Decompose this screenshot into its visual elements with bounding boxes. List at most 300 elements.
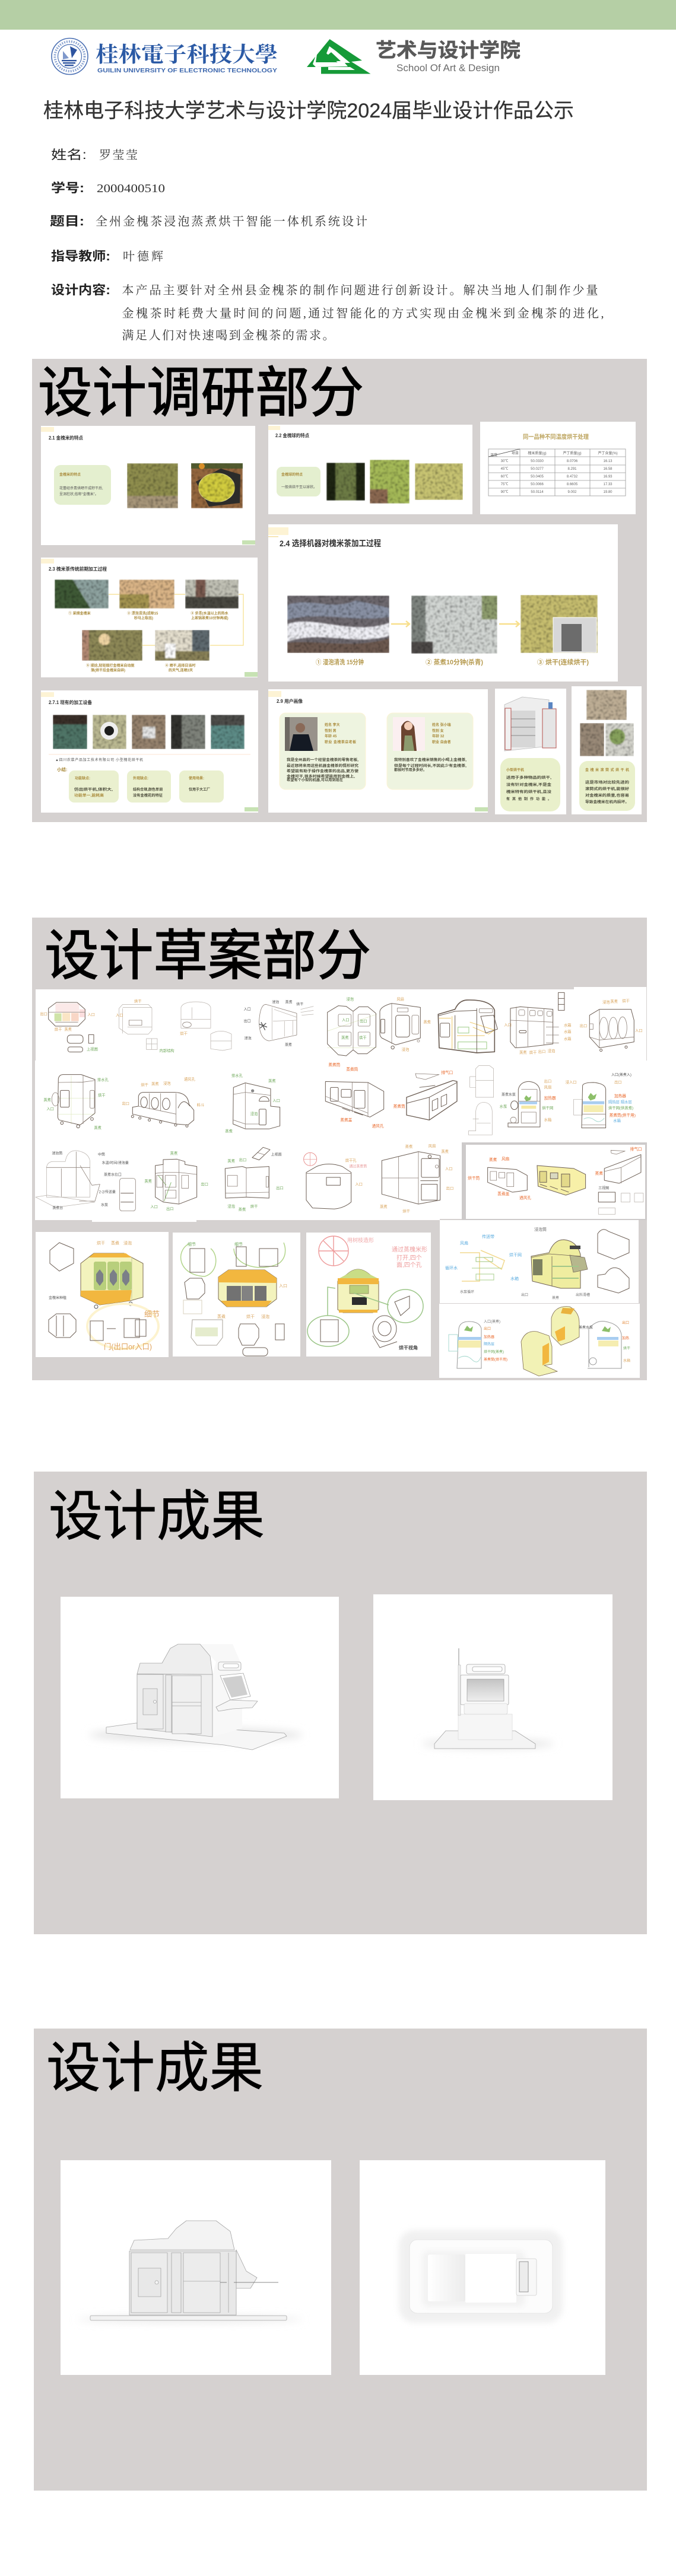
data table: 9.002: [567, 491, 577, 494]
sketch: framed orange-labelled machine: 通风孔: [519, 1195, 531, 1201]
sketch: pencil concept with platform: 水泵: [101, 1202, 108, 1207]
sketch: pencil concept with platform: 中筒: [98, 1152, 105, 1157]
labels: 浸泡: [261, 1314, 269, 1319]
school Chinese name: 艺术与设计学院: [376, 39, 521, 61]
sketch: section view front: 加热器: [544, 1095, 556, 1100]
sketch: rounded box: 内部结构: [159, 1047, 174, 1053]
sketch: paired cabinet: 上视图: [271, 1152, 282, 1157]
photo: drum left: [580, 723, 604, 756]
door detail with yellow ring: [87, 1304, 160, 1351]
persona story: 我是全州县的一个经营金槐茶的零售老板,: [287, 757, 358, 762]
section labels left: [484, 1319, 507, 1362]
section labels left: 出口: [484, 1326, 491, 1331]
sketch: angular cabinet: 蒸煮: [441, 1148, 449, 1154]
photo: dryer cabinet: [504, 697, 556, 751]
sketch: three-section machine: 蒸煮: [170, 1151, 178, 1156]
sketch: capsule pencil draft: 出口: [244, 1018, 251, 1023]
caption 3: [191, 611, 228, 620]
pink note: 通过蒸槐米形: [392, 1246, 427, 1253]
persona details: 姓名 李大: [325, 722, 340, 727]
persona story: [287, 757, 358, 782]
text card: 呈洞柱状,俗称“金槐米”。: [59, 492, 99, 496]
machine rendering with dome: [338, 1269, 379, 1313]
student number row: [51, 181, 165, 195]
photo: woman illustration: [393, 717, 425, 751]
sketch: orange-labelled machine: [325, 1062, 384, 1129]
table title: 同一品种不同温度烘干处理: [523, 433, 589, 441]
data table: 60℃: [501, 475, 508, 479]
sketch: orange-labelled machine: 蒸煮筒: [346, 1066, 358, 1072]
text card: 槐米特有的烘干机,且没: [506, 789, 551, 794]
sketch: three-section machine: 出口: [201, 1181, 208, 1186]
sketch: paired cabinet: 烘干: [250, 1203, 258, 1209]
sketch: four-section cabinet with ladder: 浸泡: [548, 1048, 556, 1053]
advisor row: 叶德辉: [123, 250, 163, 263]
top labels: [49, 1240, 132, 1300]
persona story: 但是每个过程时间长,不因此少有金槐茶,: [394, 763, 466, 768]
top right small sketch: [598, 1230, 629, 1259]
process arrows: [109, 594, 243, 645]
caption 4: 的天气,连晒3天: [169, 668, 193, 673]
persona details: 年龄 45: [325, 734, 337, 738]
sketch: rounded cabinet: 排水孔: [97, 1077, 109, 1082]
pink note: 打开,四个: [396, 1254, 422, 1262]
sketch: front elevations: [468, 1066, 494, 1135]
photo: drum right: [605, 723, 634, 756]
caption 2: ② 漂泡清洗(滤除15: [127, 611, 158, 616]
machine rendering with three hex windows: [81, 1253, 143, 1308]
sketch: yellow colored machine: [537, 1166, 586, 1195]
data table: 50.0330: [531, 460, 544, 463]
slide 2.9 user personas: [268, 689, 488, 813]
caption 3: 上蒸锅蒸煮10分钟再成): [191, 616, 228, 620]
sketch: angular cabinet: 蒸煮: [405, 1144, 413, 1149]
data table: 50.0405: [531, 475, 544, 479]
gray labels: 蒸煮: [552, 1295, 559, 1300]
sketch: four-section cabinet with ladder: 水箱: [564, 1036, 572, 1041]
caption 2: [127, 611, 158, 620]
text card: 一般烘焙干至以球状。: [281, 485, 317, 489]
section labels right: [579, 1320, 630, 1363]
card: usage scene: 使用场景:: [189, 776, 204, 781]
sketch: double hexagon unit: 浸泡: [346, 996, 354, 1002]
sketch: section view side: 隔热层 隔水层: [608, 1099, 632, 1104]
persona card 2: [387, 713, 473, 789]
photo: dried buds: [127, 463, 178, 508]
pink note: 用树枝造形: [347, 1237, 374, 1243]
card: appearance drawback: 结构合理,颜色单调: [133, 787, 163, 792]
sketch: long machine with three ovals: 通风孔: [184, 1077, 196, 1082]
sketch: three ovals hexagon: 蒸煮: [610, 999, 618, 1004]
door detail with yellow ring: 门(出口or入口): [104, 1342, 152, 1351]
sketch: double hexagon unit: 出口: [360, 1018, 367, 1023]
sketch: angular cabinet: 出口: [446, 1186, 453, 1191]
sketch: paired cabinet: 出口: [276, 1185, 284, 1190]
card: appearance drawback: [127, 770, 171, 803]
render: front view: [373, 1594, 612, 1800]
exploded view: [460, 1250, 504, 1281]
sketch: orange-labelled machine: 通风孔: [372, 1123, 384, 1129]
sketch: framed orange-labelled machine: 蒸煮盖: [497, 1191, 510, 1196]
heading: design research: 设计调研部分: [38, 363, 364, 424]
sketch: four-section cabinet with ladder: 蒸煮: [519, 1050, 527, 1055]
slide: drying data table: [480, 422, 636, 514]
sketch: section view front: 水泵: [500, 1103, 507, 1109]
advisor row: 指导教师:: [51, 250, 110, 263]
card: function drawback: 功能缺点:: [75, 776, 90, 781]
sketch: three ovals hexagon: 入口: [635, 1028, 643, 1033]
sketch: tall machine: 入口: [272, 1098, 280, 1103]
sketch: framed orange-labelled machine: 风扇: [502, 1156, 509, 1161]
photo: washing: [119, 579, 174, 609]
sketch: three ovals hexagon: 出口: [580, 1023, 587, 1029]
door details: [188, 1241, 278, 1272]
slide title: 2.1 金槐米的特点: [49, 435, 83, 441]
text card: 金槐球的特点: [281, 472, 303, 477]
sketch: angled machine with hood: [393, 1070, 457, 1120]
data table: 项目: [512, 451, 519, 456]
sketch: dome machine: 烘干: [180, 1030, 188, 1036]
section view right: [588, 1322, 621, 1368]
labels: 入口: [279, 1284, 287, 1288]
framed sketch sheet: [462, 1142, 647, 1220]
persona details: 性别 男: [325, 728, 337, 733]
sketch: hexagon machine with labels: [40, 1002, 98, 1052]
photo: picking: [55, 579, 109, 609]
sketch: double hexagon unit: [328, 996, 377, 1056]
sketch: tall machine: 排水孔: [231, 1073, 243, 1078]
design description row: 满足人们对快速喝到金槐茶的需求。: [122, 329, 335, 342]
sketch: paired cabinet: 浸泡: [227, 1203, 236, 1209]
photo: drum top: [586, 690, 627, 720]
caption 3: ③ 烘干(连续烘干): [537, 658, 589, 666]
sketch: paired cabinet: 蒸煮: [227, 1158, 236, 1163]
photo: equipment 4: [171, 715, 205, 749]
data table: 16.93: [603, 475, 612, 479]
logo: School of Art & Design: [307, 39, 521, 74]
sketch: rounded box: [116, 998, 174, 1053]
sketch sheet background: [35, 987, 647, 1222]
slide title: 2.4 选择机器对槐米茶加工过程: [280, 539, 381, 548]
photo: buds on plate: [191, 463, 243, 508]
coloured sketch sheet C: [306, 1233, 431, 1357]
section labels left: 烘干网(蒸煮): [484, 1349, 504, 1354]
sketch: pencil concept with platform: 2-2/传送量: [99, 1190, 116, 1195]
text card: 对金槐米的质量,也容易: [585, 793, 629, 798]
sketch: rounded cabinet with wheels: 蒸煮: [423, 1019, 431, 1024]
photo: soaking water: [287, 596, 389, 653]
data table: 45℃: [501, 467, 508, 471]
text card: 没有针对金槐米,不是金: [506, 782, 551, 787]
detail sketches: 烘干视角: [399, 1345, 418, 1351]
sketch: hexagon machine with labels: 出口: [40, 1011, 47, 1017]
render: side elevation: [61, 2160, 331, 2375]
sketch: angular cabinet: 风扇: [429, 1143, 436, 1148]
sketch: pencil concept with platform: 蒸煮台: [52, 1205, 63, 1210]
gray labels: 出料滑槽: [576, 1292, 590, 1297]
green detail arcs: [307, 1287, 423, 1346]
section view left: [449, 1322, 481, 1368]
photo: sun drying: [155, 630, 210, 661]
sketch: capsule pencil draft: 入口: [244, 1007, 251, 1011]
data table: 芦丁含量(%): [598, 451, 618, 456]
section labels left: 隔热层: [484, 1342, 494, 1346]
persona details: [432, 722, 451, 744]
section labels left: 入口(蒸煮): [484, 1319, 500, 1324]
sketch: angular cabinet: 蒸煮: [380, 1204, 388, 1209]
sketch: long machine with three ovals: [122, 1077, 204, 1127]
data table: [488, 449, 626, 496]
sketch: section view side: [566, 1072, 636, 1128]
sketch: rounded cabinet with wheels: [380, 996, 431, 1052]
card: usage scene: 仅用于大工厂: [189, 787, 210, 792]
data table: 16.13: [603, 460, 612, 463]
section labels left: 蒸煮筒(烘干用): [484, 1357, 507, 1362]
sketch: long machine with three ovals: 浸泡: [163, 1080, 171, 1085]
blue labels: 烘干网: [509, 1252, 522, 1257]
logo: Guilin University of Electronic Technology: [52, 38, 278, 75]
slide 2.7.1: [41, 690, 258, 813]
sketch: angular cabinet: 烘干: [402, 1208, 410, 1214]
sketch: section view side: 蒸煮筒(烘干用): [610, 1113, 636, 1118]
data table: 16.58: [603, 467, 612, 471]
name row: [51, 148, 138, 162]
blue labels: [445, 1234, 522, 1294]
sketch: hexagon machine with labels: 入口: [87, 1012, 95, 1017]
isometric yellow units: [521, 1307, 579, 1376]
sketch: double hexagon unit: 入口: [342, 1018, 350, 1023]
caption 3: ③ 杀青(水温以上的热水: [191, 611, 228, 616]
sketch: cooker-shaped machine: 通过蒸煮筒: [349, 1164, 367, 1168]
project title row: 全州金槐茶浸泡蒸煮烘干智能一体机系统设计: [96, 215, 367, 228]
sketch: angular cabinet: [380, 1143, 453, 1214]
sketch: pencil concept with platform: 蒸煮水位口: [104, 1172, 122, 1177]
card: appearance drawback: 外观缺点:: [133, 776, 148, 781]
section labels left: 加热器: [484, 1335, 494, 1339]
gray labels: 浸泡筒: [534, 1227, 547, 1232]
detail sketches: [320, 1296, 418, 1351]
slide 2.3: [41, 558, 258, 677]
persona details: 职业 自由者: [432, 740, 451, 744]
student number row: 学号:: [51, 181, 84, 195]
sketch: section view side: 烘干网(供蒸煮): [608, 1105, 633, 1110]
caption 2: 秒马上取出): [134, 616, 153, 620]
persona details: 姓名 张小瑞: [432, 722, 451, 727]
photo: blanching: [185, 579, 239, 609]
sketch: hexagon machine with labels: 上视图: [87, 1046, 98, 1052]
persona story: 希望能有助于操作金槐茶的出品,更方便: [287, 769, 358, 773]
sketch: three-section machine: 蒸煮: [144, 1178, 153, 1183]
name row: 姓名:: [51, 148, 87, 162]
sketch: orange-labelled machine: 蒸煮筒: [328, 1062, 341, 1067]
slide 2.1: [41, 426, 255, 545]
sketch: orange-labelled machine: 蒸煮盖: [340, 1117, 353, 1123]
advisor row: [51, 250, 163, 263]
sketch: three-section machine: 入口: [150, 1205, 158, 1209]
sketch: section view side: 浸入口: [566, 1080, 577, 1085]
labels: 蒸煮: [217, 1314, 226, 1319]
text card: [277, 467, 320, 496]
persona story: [394, 757, 466, 772]
sketch: section view side: 水箱: [613, 1118, 621, 1123]
sketch: pencil concept with platform: [36, 1151, 135, 1211]
sketch: framed angled machine and views: 三视图: [598, 1186, 609, 1190]
card: function drawback: 功能单一,能耗高: [74, 793, 104, 798]
front detail sketch: [49, 1314, 76, 1338]
photo: green shrub: [370, 460, 410, 504]
sketch: angled machine with hood: 排气口: [441, 1070, 453, 1075]
heading: design results: 设计成果: [49, 1486, 265, 1547]
persona details: 职业 金槐茶店老板: [325, 740, 356, 744]
lower right small sketch: [598, 1268, 629, 1293]
persona story: 最近想将来用这些机器金槐茶的情形研究: [287, 763, 358, 768]
sketch: paired cabinet: 出口: [239, 1157, 246, 1163]
sketch: rounded cabinet: 蒸煮: [94, 1125, 102, 1130]
section labels right: 出口: [622, 1320, 629, 1325]
coloured sketch sheet D: [440, 1220, 639, 1303]
coloured sketch sheet E: [439, 1304, 640, 1378]
data table: 槐米质量(g): [528, 451, 547, 456]
persona details: 年龄 32: [432, 734, 445, 738]
sketch: three-section machine: [144, 1151, 208, 1211]
sketch: long machine with three ovals: 出口: [122, 1100, 129, 1106]
sketch: dome concept with colored lines: [438, 1000, 497, 1053]
sketch: pencil concept with platform: 水温/时间/浸泡量: [102, 1160, 129, 1165]
sketch: paired cabinet: 蒸煮: [239, 1206, 246, 1212]
sketch: angular cabinet: 入口: [445, 1167, 453, 1171]
data table: 19.80: [603, 491, 612, 494]
small elevations: [183, 1278, 284, 1356]
pink note: [347, 1237, 427, 1269]
persona story: 希望有个小型的机器,可以用到现在: [287, 778, 343, 782]
panel: design sketches: [32, 918, 647, 1380]
sketch: framed orange-labelled machine: 蒸煮: [489, 1157, 497, 1163]
pink sphere detail: [319, 1236, 348, 1266]
section labels right: 水箱: [623, 1358, 630, 1363]
sketch: rounded cabinet: [43, 1075, 109, 1130]
caption 2: ② 蒸煮10分钟(杀青): [426, 658, 483, 666]
sketch: paired cabinet: [225, 1147, 284, 1212]
machine rendering with dark windows: [218, 1270, 277, 1307]
caption 5: [86, 663, 134, 673]
data table: 90℃: [501, 490, 508, 494]
pink note: 面,四个孔: [396, 1262, 422, 1269]
blue labels: 水泵循环: [460, 1289, 474, 1294]
coloured sketch sheet A: [36, 1232, 169, 1357]
persona details: [325, 722, 356, 744]
slide title: 2.7.1 现有的加工设备: [49, 699, 92, 705]
top green band: [0, 0, 676, 30]
top detail sketch: [50, 1243, 74, 1271]
slide: drum dryer: [572, 686, 642, 814]
sketch: section view front: 风扇: [544, 1084, 551, 1090]
sketch: double hexagon unit: 烘干: [359, 1035, 367, 1040]
labels: [217, 1284, 287, 1319]
sketch: section view front: 蒸煮水泵: [502, 1092, 516, 1097]
sketch: tall machine: 浸泡: [250, 1111, 258, 1116]
green detail arcs: [181, 1243, 285, 1276]
arrow: [391, 621, 410, 627]
card: appearance drawback: 没有金槐花的特征: [133, 793, 163, 798]
slide title: 2.2 金槐球的特点: [275, 432, 309, 438]
sketch: angled machine with hood: 蒸煮筒: [393, 1103, 405, 1109]
data table: 17.33: [603, 483, 612, 486]
slide title: 2.9 用户画像: [277, 698, 303, 704]
sketch: framed orange-labelled machine: 烘干筒: [468, 1175, 480, 1180]
text card: 滚筒式的烘干机,能很好: [585, 787, 629, 791]
door details: 细节: [188, 1241, 196, 1247]
sketches group: right half: [306, 992, 643, 1214]
school English name: School Of Art & Design: [396, 62, 500, 74]
photo: equipment 2: [93, 715, 126, 749]
top labels: 蒸煮: [111, 1240, 119, 1246]
render: perspective view: [61, 1597, 339, 1798]
design description row: 金槐茶时耗费大量时间的问题,通过智能化的方式实现由金槐米到金槐茶的进化,: [122, 307, 604, 320]
photo: rubbing: [82, 630, 142, 661]
sketch: four-section cabinet with ladder: 水箱: [564, 1029, 572, 1034]
sketch: dome machine: [180, 1002, 231, 1050]
sketch: section view front: [500, 1078, 556, 1127]
sketch: cooker-shaped machine: 入口: [355, 1182, 363, 1186]
sketch: three ovals hexagon: 浸泡: [602, 999, 610, 1005]
sketch: capsule pencil draft: 浸泡: [245, 1036, 252, 1040]
data table: 75℃: [501, 482, 508, 486]
text card: 金槐米的特点: [59, 472, 81, 477]
coloured sketch sheet B: [173, 1233, 300, 1357]
photo: drying field: [415, 463, 463, 500]
card: function drawback: [69, 770, 119, 803]
main title: 桂林电子科技大学艺术与设计学院2024届毕业设计作品公示: [43, 100, 574, 122]
sketch: tall machine: 蒸煮: [268, 1078, 276, 1083]
text card: 有其他制作功能。: [506, 797, 551, 801]
top labels: 浸泡: [123, 1240, 132, 1246]
text card: [500, 758, 560, 811]
sketch: rounded cabinet: 入口: [46, 1107, 54, 1112]
sketch: rounded box: 入口: [116, 1012, 123, 1017]
design description row: 本产品主要针对全州县金槐茶的制作问题进行创新设计。解决当地人们制作少量: [122, 284, 598, 297]
name row: 罗莹莹: [99, 148, 138, 162]
university name: 桂林電子科技大學: [96, 43, 278, 66]
project title row: 题目:: [50, 215, 84, 228]
blue labels: 循环水: [445, 1265, 458, 1271]
text card: 小型烘干机: [506, 768, 524, 772]
door details: 细节: [234, 1241, 243, 1247]
data table: 温度: [490, 453, 497, 457]
sketch: sphere detail: [304, 1152, 317, 1166]
render: top view: [360, 2160, 605, 2375]
sketch: long machine with three ovals: 蒸煮: [151, 1081, 159, 1086]
gray labels: 出口: [521, 1292, 528, 1297]
summary label: 小结:: [57, 766, 68, 772]
caption 4: ④ 晒干,选择日当时: [165, 663, 195, 668]
sketch: four-section cabinet with ladder: 烘干: [529, 1050, 537, 1055]
yellow machine: [531, 1240, 588, 1288]
sketch: cooker-shaped machine: 烘干孔: [345, 1157, 357, 1163]
sketch: framed angled machine and views: 排气口: [630, 1146, 642, 1151]
sketch: long machine with three ovals: 烘干: [141, 1082, 148, 1087]
slide 2.4: [268, 524, 618, 682]
text card: [54, 465, 111, 505]
slide title: 2.3 槐米茶传统前期加工过程: [49, 566, 107, 572]
top labels: 烘干: [97, 1240, 105, 1246]
card: function drawback: 仿出烘干机,体积大,: [74, 787, 113, 792]
slide: small dryer: [495, 689, 566, 814]
sketch: rounded cabinet with wheels: 风扇: [396, 996, 404, 1002]
sketch: three ovals hexagon: [580, 998, 643, 1052]
sketch: rounded cabinet: 烘干: [98, 1092, 106, 1097]
data table: 50.0114: [531, 491, 544, 494]
photo: dark foliage: [326, 463, 365, 501]
